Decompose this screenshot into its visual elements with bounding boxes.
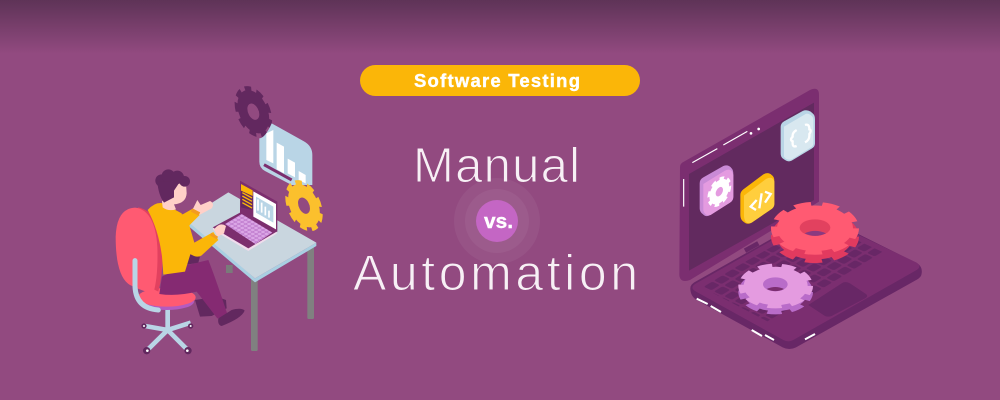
laptop on desk (213, 181, 277, 251)
keyboard keys (701, 222, 884, 321)
trackpad (808, 282, 867, 317)
chair (116, 207, 196, 354)
illustration: laptop with gears (679, 89, 922, 349)
torso (148, 203, 192, 275)
vs badge (454, 178, 540, 264)
badge: Software Testing: Software Testing (414, 70, 580, 91)
icon: dark gear (237, 83, 270, 141)
person (148, 169, 245, 326)
desk (189, 192, 316, 351)
icon: pink gear (741, 265, 810, 313)
hair (155, 169, 190, 203)
title: Automation: Automation (353, 245, 638, 301)
laptop base (690, 213, 922, 349)
illustration: person at desk (116, 83, 321, 354)
icon: code braces tile (781, 110, 815, 161)
panel: floating chart (259, 123, 312, 185)
title: Manual: Manual (413, 139, 580, 193)
arm and hand (171, 207, 218, 257)
icon: gear tile (700, 165, 733, 216)
icon: yellow gear (287, 177, 321, 235)
vs badge: vs. (484, 211, 513, 233)
head (162, 183, 187, 210)
badge: Software Testing (360, 65, 640, 96)
laptop screen (679, 89, 819, 281)
icon: red gear (774, 204, 856, 261)
base highlights (697, 299, 815, 340)
icon: code tag tile (740, 173, 774, 224)
